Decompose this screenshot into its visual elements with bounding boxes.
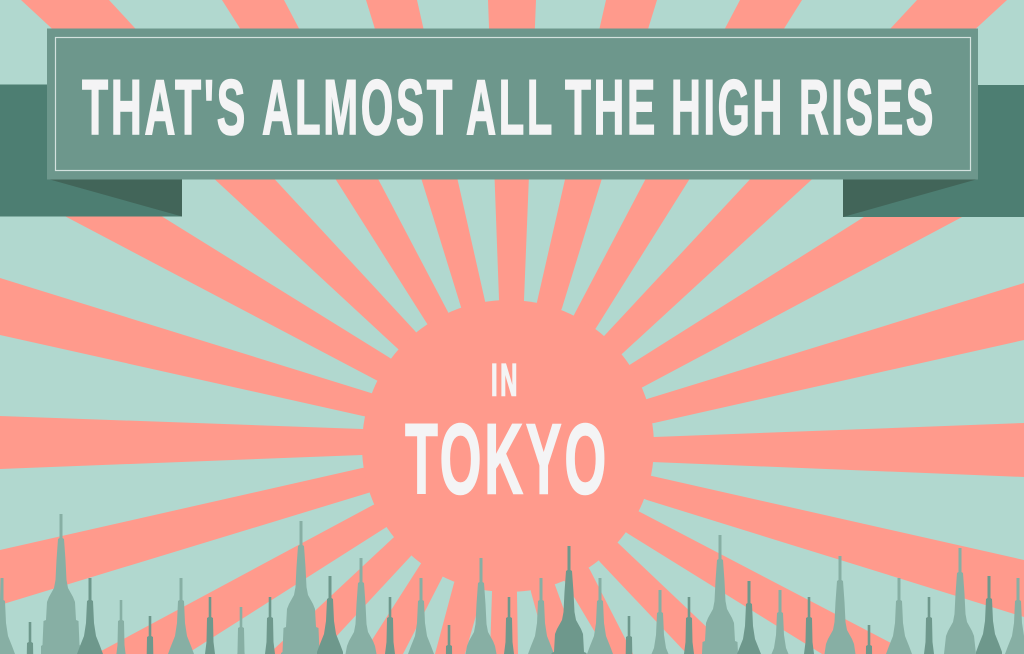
title text <box>82 63 936 151</box>
title text: THE <box>565 63 658 151</box>
title text: ALMOST <box>262 63 455 151</box>
subtitle: TOKYO: TOKYO <box>405 404 609 516</box>
ribbon tail: right <box>843 85 1024 217</box>
skyline silhouette <box>0 514 1024 654</box>
title text: HIGH <box>671 63 785 151</box>
subtitle: IN: IN <box>491 354 520 406</box>
title text: THAT'S <box>82 63 248 151</box>
title text: ALL <box>466 63 555 151</box>
title banner <box>47 28 978 180</box>
sun disc <box>362 300 654 592</box>
ribbon tail: left <box>0 84 182 216</box>
